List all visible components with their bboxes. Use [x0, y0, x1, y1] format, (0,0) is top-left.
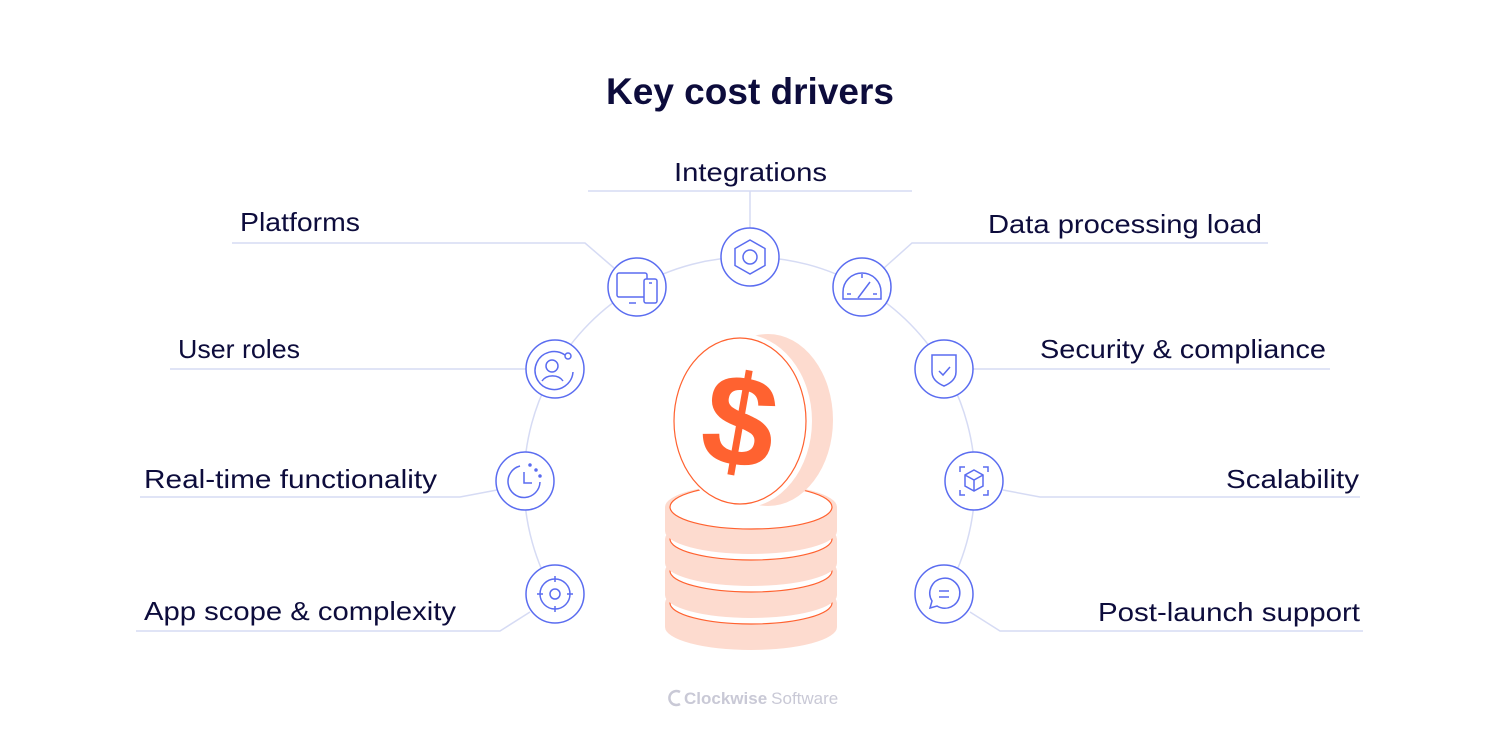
- label: Scalability: [1003, 464, 1360, 497]
- label: Platforms: Platforms: [240, 207, 360, 237]
- coin stack: [665, 484, 837, 650]
- label: Real-time functionality: [140, 464, 497, 497]
- icon: app scope target: [526, 565, 584, 623]
- label: Integrations: [588, 157, 912, 229]
- footer logo: ClockwiseSoftware: [684, 689, 838, 708]
- icon: post-launch chat: [915, 565, 973, 623]
- icon: integrations hex nut: [721, 228, 779, 286]
- label: Scalability: Scalability: [1226, 464, 1359, 494]
- label: Post-launch support: Post-launch support: [1098, 597, 1361, 627]
- connector arc: [524, 257, 975, 596]
- label: Real-time functionality: Real-time functionality: [144, 464, 437, 494]
- icon: platforms devices: [608, 258, 666, 316]
- standing dollar coin: [672, 334, 833, 508]
- label: Security & compliance: Security & compliance: [1040, 334, 1326, 364]
- label: App scope & complexity: App scope & complexity: [144, 596, 456, 626]
- icon: user roles: [526, 340, 584, 398]
- icon: data gauge: [833, 258, 891, 316]
- label: Platforms: [232, 207, 614, 268]
- label: Data processing load: [884, 209, 1268, 268]
- standing dollar coin: $: [692, 343, 788, 499]
- label: Post-launch support: [970, 597, 1363, 631]
- label: Data processing load: Data processing load: [988, 209, 1262, 239]
- label: App scope & complexity: [136, 596, 530, 631]
- icon: scalability cube: [945, 452, 1003, 510]
- label: User roles: User roles: [178, 334, 300, 364]
- title: Key cost drivers: [606, 71, 894, 112]
- label: Integrations: Integrations: [674, 157, 827, 187]
- icon: security shield: [915, 340, 973, 398]
- icon: real-time clock: [496, 452, 554, 510]
